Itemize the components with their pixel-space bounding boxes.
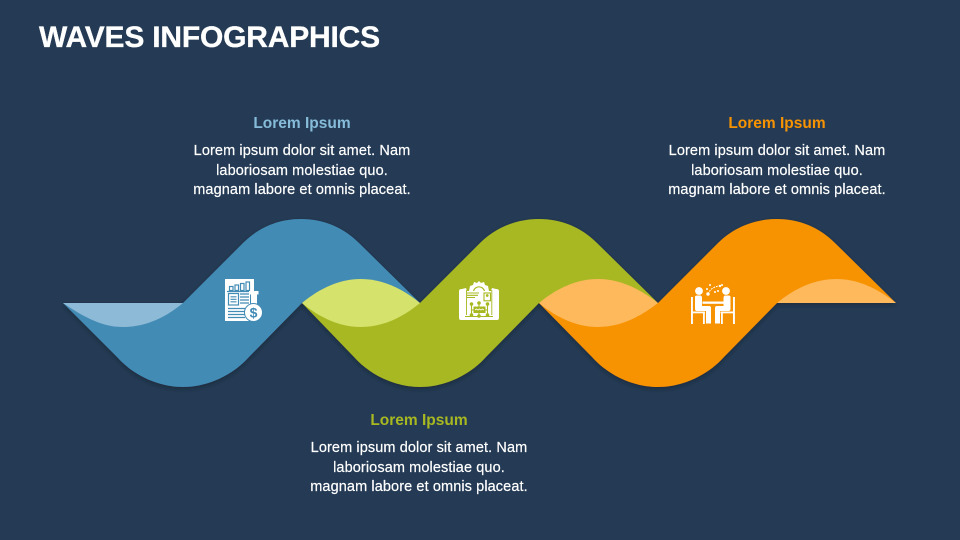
text block: orange: laboriosam molestiae quo. [691,163,863,179]
icon: financial report with flask: $ [250,304,258,320]
orange ribbon [539,219,896,387]
wave band: blue [63,219,420,387]
icon: blueprint with gear [459,281,499,320]
wave band: green [302,219,658,387]
text block: green: laboriosam molestiae quo. [333,460,505,476]
text block: green [310,412,528,495]
green light lens [302,279,420,327]
text block: orange [668,115,886,198]
text block: green: magnam labore et omnis placeat. [310,479,528,495]
text block: green: Lorem Ipsum [370,412,468,429]
text block: orange: magnam labore et omnis placeat. [668,182,886,198]
title: WAVES INFOGRAPHICS [39,21,380,54]
orange light lens left [539,279,658,327]
text block: orange: Lorem Ipsum [728,115,826,132]
blue light lens [63,303,183,327]
text block: green: Lorem ipsum dolor sit amet. Nam [311,440,527,456]
blue ribbon [63,219,420,387]
text block: orange: Lorem ipsum dolor sit amet. Nam [669,143,885,159]
text block: blue: Lorem ipsum dolor sit amet. Nam [194,143,410,159]
text block: blue [193,115,411,198]
wave band: orange [539,219,896,387]
text block: blue: Lorem Ipsum [253,115,351,132]
icon: two people at a table [691,284,735,324]
text block: blue: laboriosam molestiae quo. [216,163,388,179]
green ribbon [302,219,658,387]
orange light lens right [777,279,896,303]
icon: financial report with flask [225,279,262,322]
text block: blue: magnam labore et omnis placeat. [193,182,411,198]
